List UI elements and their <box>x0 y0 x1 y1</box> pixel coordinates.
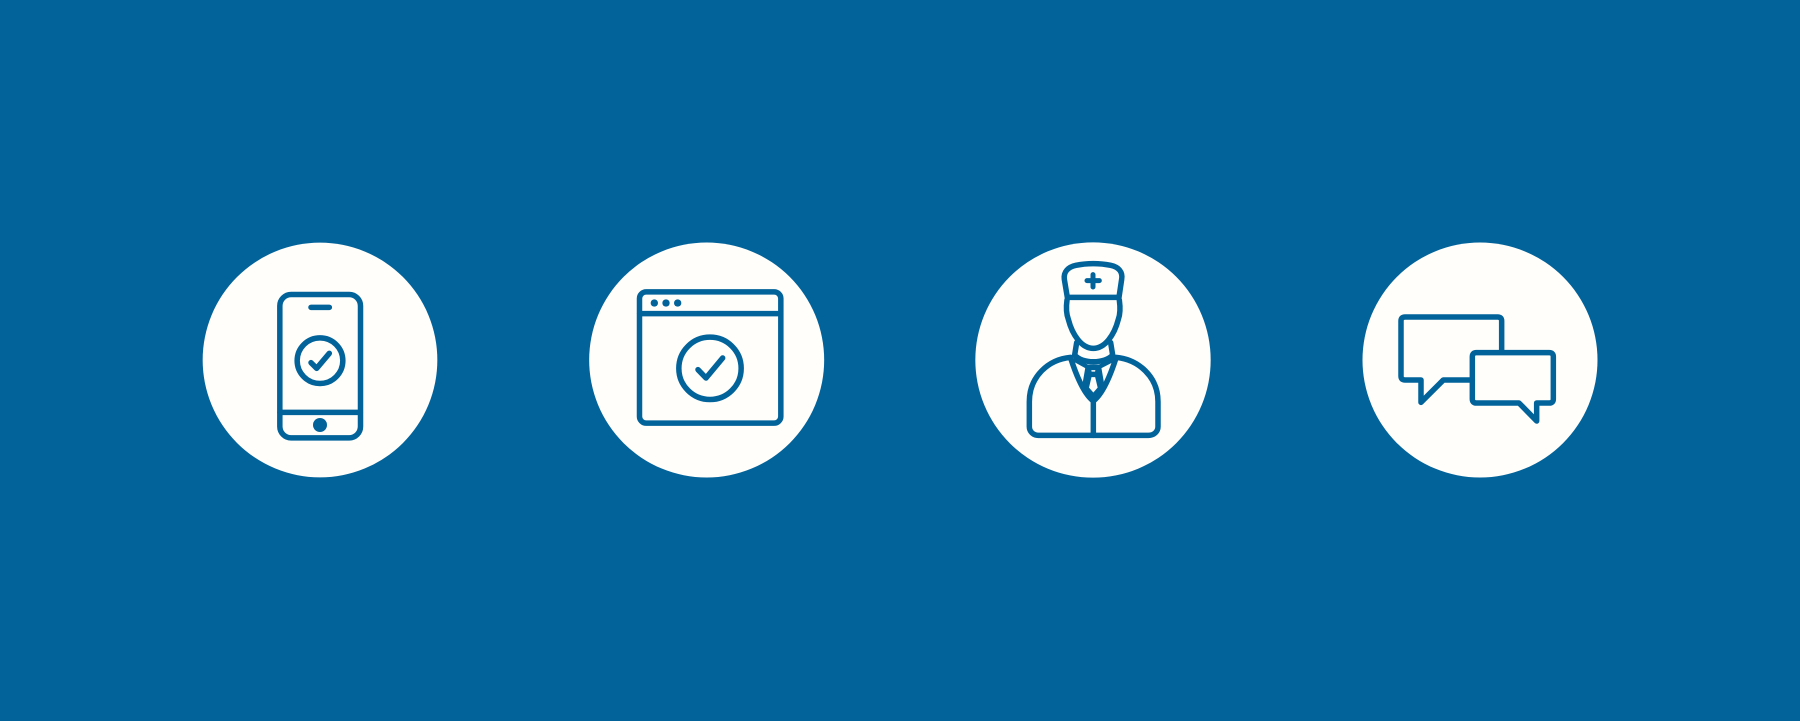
browser window dots <box>651 299 681 307</box>
white circle: doctor <box>975 242 1211 478</box>
white circle: speech bubbles <box>1362 242 1597 477</box>
icon: smartphone with check mark in circle <box>203 243 437 477</box>
icon: doctor with medical cap <box>975 242 1211 478</box>
phone home button <box>313 418 327 432</box>
browser outline <box>639 292 781 423</box>
icon: browser window with check mark <box>589 242 824 477</box>
phone outline <box>280 294 360 438</box>
white circle: phone <box>203 243 437 477</box>
icon: two overlapping speech bubbles <box>1362 242 1597 477</box>
white circle: browser <box>589 242 824 477</box>
doctor outline <box>1029 264 1158 435</box>
speech bubble outlines <box>1401 317 1553 421</box>
